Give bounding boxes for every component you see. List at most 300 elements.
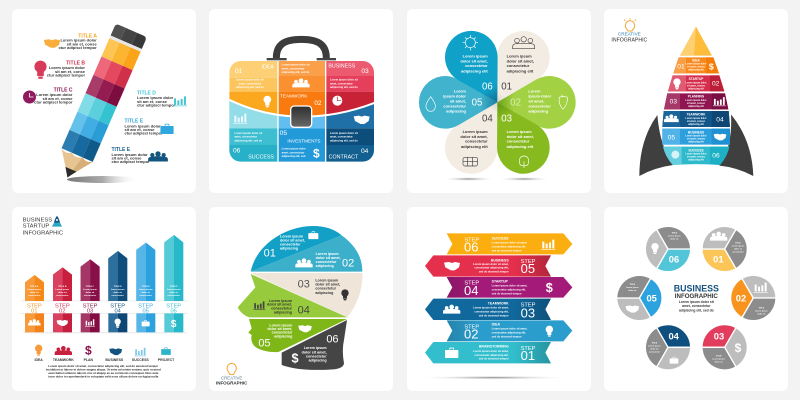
text block: title B: Lorem ipsum dolor bbox=[49, 65, 85, 70]
circle 06: TITLE bbox=[672, 232, 678, 234]
petal 02 bbox=[497, 76, 576, 129]
text block: title F bbox=[112, 147, 150, 164]
creative infographic logo: CREATIVE bbox=[221, 376, 242, 381]
text block: title E bbox=[124, 118, 163, 136]
row 03 planning: adipiscing elit bbox=[688, 105, 704, 108]
panel: flower infographic: 03 bbox=[501, 114, 512, 125]
arrow step 06: Lorem ipsum dolor sit amet, bbox=[492, 241, 527, 245]
row 06 success: sit amet, consec bbox=[687, 156, 706, 159]
panel: flower infographic: 04 bbox=[482, 114, 493, 125]
head segment 06 bbox=[282, 320, 347, 370]
text block: title C: sit am et, conse bbox=[42, 96, 73, 101]
circle 02: dolor sit bbox=[757, 312, 766, 315]
flower shadows bbox=[442, 177, 551, 181]
section 03 business: 03 bbox=[361, 68, 369, 75]
section 04 contract: CONTRACT bbox=[329, 155, 359, 161]
petal text and numbers: sit amet, bbox=[450, 98, 466, 103]
text block: title F: Lorem ipsum dolor bbox=[112, 152, 148, 157]
head numbers: 05 bbox=[258, 338, 271, 350]
circle 05: TITLE bbox=[630, 284, 636, 286]
text block: title D: ctur adipisci tempor bbox=[137, 102, 176, 108]
arrow step 03: STEP bbox=[521, 303, 536, 309]
arrow step 05: sed do eiusmod tempor bbox=[479, 270, 509, 274]
heading: INFOGRAPHIC bbox=[23, 230, 63, 236]
petal text and numbers: ipsum dolor bbox=[528, 93, 552, 98]
paragraph: exercitation ullamco laboris nisi ut aliquip ex ea commodo consequat. Duis aute bbox=[48, 371, 159, 375]
head icons bbox=[253, 231, 349, 366]
row 01 idea: Lorem ipsum dolor bbox=[685, 64, 707, 66]
creative infographic logo bbox=[216, 363, 248, 385]
bar step 06: $ bbox=[171, 319, 177, 330]
petal text and numbers: consectetur bbox=[507, 63, 530, 68]
paragraph: incididunt ut labore et dolore magna aliqua. Ut enim ad minim veniam, quis nostrud bbox=[46, 367, 161, 371]
bar step 01: STEP bbox=[27, 303, 42, 309]
legend icons bbox=[35, 343, 171, 357]
bar step 01: TITLE A bbox=[30, 285, 39, 288]
row 03 planning: 03 bbox=[670, 99, 677, 106]
circle 06: 06 bbox=[669, 255, 679, 265]
icon: strawberry outline bbox=[559, 95, 567, 109]
section 05 investments: 05 bbox=[280, 130, 287, 137]
section 05 investments: amet, consectetur bbox=[282, 150, 304, 154]
section 03 business: amet, consectetur bbox=[330, 81, 353, 85]
arrow step 05: STEP bbox=[521, 259, 536, 265]
arrow step 02: Lorem ipsum dolor sit amet, bbox=[492, 327, 527, 331]
row 02 startup: 02 bbox=[712, 81, 720, 88]
section 02 teamwork bbox=[280, 63, 322, 107]
circle 01: Lorem ipsum bbox=[732, 245, 744, 248]
circle 04: Lorem ipsum bbox=[648, 345, 661, 348]
arrow step 04: STEP bbox=[464, 280, 479, 286]
pencil bbox=[52, 24, 147, 184]
circle 04: 04 bbox=[668, 331, 680, 341]
section 05 investments: adipiscing elit, sed bbox=[282, 154, 306, 158]
head numbers: 03 bbox=[298, 279, 310, 291]
legend labels: BUSINESS bbox=[105, 358, 124, 362]
bar step 01: dolor sit bbox=[30, 291, 39, 294]
bar step 04: Lorem ipsum bbox=[111, 289, 125, 291]
row 04 teamwork: sit amet, consec bbox=[687, 120, 706, 123]
petal text and numbers: Lorem ipsum bbox=[463, 53, 488, 58]
row 03 planning bbox=[664, 93, 728, 109]
paragraph: irure dolor in reprehenderit in voluptate velit esse cillum dolore eu fugiat nulla bbox=[48, 374, 159, 378]
bar step 04 bbox=[108, 251, 127, 332]
text block: title E: ctur adipisci tempor bbox=[124, 130, 163, 136]
center heading: Lorem ipsum dolor sit bbox=[679, 300, 715, 304]
pencil shadow bbox=[67, 176, 139, 183]
circle 03 bbox=[694, 316, 756, 378]
arrow step 05: Lorem ipsum dolor sit amet, bbox=[473, 262, 509, 266]
circle 06: Lorem ipsum bbox=[668, 234, 681, 237]
head text blocks: adipiscing bbox=[274, 311, 292, 315]
icon: solar panel bbox=[463, 157, 478, 166]
arrow step 02: STEP bbox=[464, 324, 479, 330]
icon: briefcase bbox=[160, 124, 174, 134]
panel: head infographic bbox=[209, 207, 393, 391]
petal text and numbers: adipiscing elit bbox=[461, 144, 488, 149]
head text blocks: Lorem ipsum bbox=[280, 234, 304, 238]
bar step 01 bbox=[25, 275, 44, 332]
panel: flower infographic: 01 bbox=[501, 81, 512, 92]
row 01 idea: IDEA bbox=[692, 58, 700, 62]
head text blocks: adipiscing bbox=[315, 291, 333, 295]
section 06 success bbox=[233, 114, 274, 161]
arrow step 05: consectetur adipiscing elit, bbox=[474, 266, 509, 270]
head icons: $ bbox=[291, 352, 299, 366]
section 02 teamwork: 02 bbox=[314, 100, 322, 107]
head text blocks: dolor sit amet, bbox=[315, 283, 340, 287]
circle 03: $ bbox=[735, 341, 742, 355]
row 02 startup: Lorem ipsum dolor bbox=[685, 82, 707, 84]
circle 02 bbox=[731, 275, 776, 321]
legend labels: SUCCESS bbox=[132, 358, 149, 362]
bar step 06: consectetur bbox=[168, 294, 180, 297]
arrow step 01: consectetur adipiscing elit, bbox=[474, 353, 509, 357]
section 01 idea: IDEA bbox=[262, 65, 274, 71]
icon: handshake bbox=[44, 39, 60, 48]
petal 05 bbox=[419, 76, 497, 129]
rocket nose bbox=[680, 27, 712, 56]
petal text and numbers: Lorem ipsum bbox=[507, 53, 532, 58]
arrow step 03: Lorem ipsum dolor sit amet, bbox=[473, 305, 509, 309]
briefcase handle bbox=[267, 39, 336, 60]
bar step 01: 01 bbox=[31, 309, 37, 315]
bar step 05: dolor sit bbox=[141, 291, 150, 294]
row 06 success: SUCCESS bbox=[688, 148, 704, 152]
row 03 planning: sit amet, consec bbox=[687, 102, 706, 105]
section 01 idea: Lorem ipsum dolor sit bbox=[236, 78, 264, 82]
bar step 03: 03 bbox=[87, 309, 93, 315]
text block: title F: TITLE E bbox=[112, 147, 131, 153]
head text blocks: adipiscing bbox=[316, 264, 334, 268]
bar step 02 bbox=[53, 267, 72, 332]
arrow step 06: SUCCESS bbox=[492, 237, 509, 241]
bar step 02: TITLE B bbox=[58, 286, 67, 288]
row 05 business: Lorem ipsum dolor bbox=[685, 136, 707, 138]
petal text and numbers: Lorem ipsum bbox=[507, 129, 532, 134]
paragraph bbox=[46, 364, 161, 378]
section 03 business bbox=[328, 64, 369, 106]
section 04 contract: 04 bbox=[361, 148, 369, 155]
icon: pie chart bbox=[23, 90, 36, 104]
head segment 05 bbox=[248, 319, 347, 352]
petal text and numbers: dolor sit amet, bbox=[460, 134, 488, 139]
text block: title A: Lorem ipsum dolor bbox=[60, 38, 97, 42]
legend labels: TEAMWORK bbox=[53, 358, 74, 362]
section 01 idea: amet, consectetur bbox=[239, 81, 261, 85]
panel: rocket infographic bbox=[604, 9, 788, 193]
head text blocks: dolor sit amet, bbox=[267, 303, 292, 307]
petal text and numbers: adipiscing elit bbox=[507, 68, 534, 73]
section 04 contract: Lorem ipsum dolor sit bbox=[330, 131, 358, 135]
bar step 06: dolor sit bbox=[169, 291, 178, 294]
icon: people outline bbox=[513, 37, 535, 49]
head text blocks: adipiscing bbox=[280, 247, 298, 251]
bar step 04: consectetur bbox=[112, 294, 124, 297]
text block: title A: ctur adipisci tempor bbox=[58, 45, 97, 50]
circle 04: TITLE bbox=[652, 343, 658, 345]
bar step 06: 06 bbox=[171, 309, 177, 315]
row 01 idea: sit amet, consec bbox=[687, 66, 706, 69]
text block: title B: ctur adipisci tempor bbox=[47, 72, 85, 78]
head numbers: 01 bbox=[264, 247, 276, 259]
text block: title E: Lorem ipsum dolor bbox=[124, 124, 161, 128]
circle 06: dolor sit bbox=[670, 237, 679, 240]
arrow step 04: 04 bbox=[464, 283, 478, 298]
arrow step 01: STEP bbox=[521, 346, 536, 352]
petal text and numbers: consectetur bbox=[443, 103, 466, 108]
section 02 teamwork: adipiscing elit, sed do bbox=[282, 70, 310, 74]
head text blocks: dolor sit amet, bbox=[280, 239, 305, 243]
row 02 startup bbox=[668, 75, 724, 91]
petal text and numbers: Lorem bbox=[528, 88, 541, 93]
row 02 startup: adipiscing elit bbox=[688, 87, 704, 90]
petal text and numbers: adipiscing bbox=[446, 108, 467, 113]
arrow step 04: $ bbox=[546, 281, 553, 295]
row 05 business: adipiscing elit bbox=[688, 141, 704, 144]
arrow step 04: STARTUP bbox=[492, 279, 509, 283]
row 01 idea: $ bbox=[709, 61, 714, 71]
head text blocks: dolor sit amet, bbox=[302, 350, 327, 354]
head text blocks: Lorem ipsum bbox=[269, 323, 293, 327]
circle 04: consectetur bbox=[649, 351, 660, 354]
bar step 04: 04 bbox=[115, 309, 121, 315]
section 05 investments: Lorem ipsum dolor bbox=[282, 147, 306, 151]
paragraph: Lorem ipsum dolor sit amet, consectetur adipiscing elit, sed do eiusmod tempor bbox=[48, 364, 158, 368]
bar step 05: 05 bbox=[143, 309, 149, 315]
bar step 01: consectetur bbox=[28, 294, 41, 297]
row 01 idea: adipiscing elit bbox=[688, 69, 704, 72]
section 06 success: amet, consectetur bbox=[234, 135, 257, 139]
head text blocks: consectetur bbox=[315, 287, 337, 291]
text block: title A: sit am et, conse bbox=[67, 41, 97, 46]
petal text and numbers: consectetur bbox=[528, 103, 551, 108]
petal text and numbers: sit amet, bbox=[528, 98, 545, 103]
ground shadow bbox=[415, 376, 572, 380]
legend icons: $ bbox=[85, 343, 92, 357]
arrow step 01: Lorem ipsum dolor sit amet, bbox=[473, 349, 509, 353]
row 02 startup: STARTUP bbox=[689, 77, 703, 81]
section 04 contract bbox=[329, 116, 370, 161]
panel: flower infographic: 05 bbox=[472, 97, 482, 108]
arrow step 03: TEAMWORK bbox=[488, 301, 509, 305]
legend labels bbox=[35, 358, 175, 362]
legend labels: IDEA bbox=[35, 358, 43, 362]
head text blocks: adipiscing bbox=[309, 359, 327, 363]
bar step 02: consectetur bbox=[56, 294, 69, 297]
petal text and numbers: consectetur bbox=[465, 63, 488, 68]
bar step 03 bbox=[81, 259, 100, 332]
head text blocks: Lorem ipsum bbox=[316, 252, 339, 256]
head text blocks: Lorem ipsum bbox=[269, 299, 293, 303]
arrow step 02: IDEA bbox=[492, 323, 500, 327]
panel: flower infographic bbox=[407, 9, 591, 193]
icon: sun bbox=[463, 35, 478, 50]
creative infographic logo: CREATIVE bbox=[618, 32, 641, 37]
arrow step 05: BUSINESS bbox=[491, 258, 509, 262]
petal 04 bbox=[435, 89, 520, 183]
text block: title F: sit am et, conse bbox=[112, 156, 142, 160]
circle 04: dolor sit bbox=[650, 348, 659, 351]
section 02 teamwork: TEAMWORK bbox=[280, 94, 308, 99]
text block: title D bbox=[137, 90, 176, 108]
petal text and numbers: Lorem bbox=[454, 88, 466, 93]
briefcase clasp bbox=[291, 106, 312, 127]
head numbers: 06 bbox=[326, 334, 339, 346]
section 01 idea: 01 bbox=[235, 68, 243, 75]
circle 02: Lorem ipsum bbox=[755, 309, 768, 312]
creative infographic logo: INFOGRAPHIC bbox=[611, 38, 648, 44]
icon: bulb bbox=[34, 61, 47, 79]
arrow step 06 bbox=[447, 233, 572, 254]
section 06 success: adipiscing elit, sed do bbox=[234, 138, 262, 142]
row 02 startup: sit amet, consec bbox=[687, 84, 706, 87]
heading: BUSINESS bbox=[23, 217, 52, 223]
bar step 02: 02 bbox=[59, 309, 65, 315]
bar step 03: consectetur bbox=[84, 294, 96, 297]
circle 03: 03 bbox=[714, 331, 724, 341]
section 01 idea bbox=[235, 65, 274, 107]
petal text and numbers: ipsum dolor bbox=[443, 93, 466, 98]
bar step 05: Lorem ipsum bbox=[139, 289, 153, 291]
panel: flower infographic: 06 bbox=[482, 81, 493, 92]
arrow step 04: consectetur adipiscing elit, bbox=[492, 287, 526, 291]
creative infographic logo: INFOGRAPHIC bbox=[216, 380, 248, 385]
petal 01 bbox=[475, 21, 559, 115]
circle 01: consectetur bbox=[732, 251, 744, 254]
circle 04 bbox=[637, 316, 699, 378]
circle 01: 01 bbox=[713, 255, 724, 265]
head text blocks: consectetur bbox=[271, 307, 293, 311]
section 06 success: 06 bbox=[233, 148, 241, 155]
bar step 03: TITLE C bbox=[86, 286, 95, 288]
petal text and numbers: consectetur bbox=[465, 139, 488, 144]
rocket fins bbox=[639, 114, 753, 176]
section 01 idea: adipiscing elit, sed do bbox=[236, 85, 264, 89]
circle 03: Lorem ipsum bbox=[712, 357, 725, 360]
icon: tree bbox=[519, 156, 529, 168]
petal text and numbers: dolor sit amet, bbox=[507, 134, 534, 139]
text block: title D: sit am et, conse bbox=[137, 99, 168, 104]
arrow step 03: consectetur adipiscing elit, bbox=[474, 309, 509, 313]
text block: title F: ctur adipisci tempor bbox=[112, 159, 150, 164]
petal 06 bbox=[435, 21, 520, 115]
arrow step 02: 02 bbox=[464, 327, 478, 342]
petal text and numbers: adipiscing elit bbox=[461, 68, 488, 73]
section 03 business: Lorem ipsum dolor sit bbox=[330, 78, 358, 82]
row 06 success bbox=[663, 147, 729, 165]
circle 01 bbox=[694, 218, 756, 280]
bar step 03: STEP bbox=[83, 303, 98, 309]
petal text and numbers: consectetur bbox=[507, 139, 530, 144]
head numbers bbox=[258, 247, 354, 350]
section 05 investments: $ bbox=[313, 147, 320, 161]
panel: pencil infographic bbox=[12, 9, 196, 193]
text block: title B bbox=[47, 60, 86, 78]
text block: title A: TITLE A bbox=[78, 34, 97, 40]
row 04 teamwork: Lorem ipsum dolor bbox=[685, 118, 707, 120]
row 01 idea: 01 bbox=[677, 63, 685, 70]
circle 03: TITLE bbox=[716, 355, 722, 357]
center heading: adipiscing elit, sed do bbox=[679, 308, 714, 312]
row 06 success: 06 bbox=[712, 152, 720, 159]
head numbers: 04 bbox=[298, 305, 310, 317]
row 06 success: adipiscing elit bbox=[688, 159, 704, 162]
petal text and numbers: dolor sit amet, bbox=[507, 58, 534, 63]
arrow step 03: 03 bbox=[521, 305, 535, 320]
icon: water drop bbox=[426, 97, 435, 111]
circle 01: dolor sit bbox=[734, 248, 742, 251]
icon: rocket bbox=[52, 216, 62, 227]
petal text and numbers: dolor sit amet, bbox=[460, 58, 488, 63]
head segment 02 bbox=[251, 235, 362, 272]
circle 06 bbox=[637, 218, 699, 280]
center heading: INFOGRAPHIC bbox=[675, 293, 718, 300]
center heading: amet, consectetur bbox=[682, 304, 711, 308]
head text blocks bbox=[267, 234, 341, 363]
bar step 06 bbox=[164, 235, 183, 332]
icon: people bbox=[148, 151, 168, 162]
arrow step 04: Lorem ipsum dolor sit amet, bbox=[492, 283, 527, 287]
arrow step 02: consectetur adipiscing elit, bbox=[492, 331, 526, 335]
section 05 investments bbox=[280, 130, 320, 161]
circle 05: dolor sit bbox=[628, 289, 637, 292]
head text blocks: consectetur bbox=[306, 354, 327, 358]
bar step 03: Lorem ipsum bbox=[83, 289, 97, 291]
section 04 contract: adipiscing elit, sed do bbox=[330, 138, 358, 142]
row 04 teamwork: TEAMWORK bbox=[687, 113, 706, 117]
row 03 planning: PLANNING bbox=[688, 95, 705, 99]
section 02 teamwork: Lorem ipsum dolor sit bbox=[282, 63, 310, 67]
head text blocks: Lorem ipsum bbox=[304, 346, 327, 350]
bar step 05: consectetur bbox=[140, 294, 152, 297]
head text blocks: dolor sit amet, bbox=[267, 327, 292, 331]
creative infographic logo bbox=[611, 18, 648, 44]
arrow step 01: BRAINSTORMING bbox=[479, 344, 509, 348]
head text blocks: adipiscing bbox=[274, 335, 292, 339]
bar step 04: dolor sit bbox=[113, 291, 122, 294]
section 06 success: Lorem ipsum dolor sit bbox=[234, 131, 262, 135]
bar step 05 bbox=[136, 243, 155, 332]
text block: title D: Lorem ipsum dolor bbox=[137, 95, 174, 100]
bar step 06: STEP bbox=[166, 303, 181, 309]
row 04 teamwork bbox=[662, 111, 730, 127]
text block: title D: TITLE D bbox=[137, 90, 156, 96]
section 02 teamwork: amet, consectetur bbox=[282, 66, 304, 70]
bar step 02: Lorem ipsum bbox=[56, 289, 69, 291]
text block: title C: ctur adipisci tempor bbox=[34, 100, 73, 104]
row 04 teamwork: adipiscing elit bbox=[688, 123, 704, 126]
arrow step 05 bbox=[425, 255, 551, 277]
arrow step 06: consectetur adipiscing elit, bbox=[492, 245, 526, 249]
panel: business startup bars bbox=[12, 207, 196, 391]
text block: title C: Lorem ipsum dolor bbox=[36, 92, 73, 97]
panel: briefcase infographic bbox=[209, 9, 393, 193]
center heading bbox=[674, 284, 719, 312]
petal text and numbers: Lorem ipsum bbox=[463, 129, 488, 134]
legend labels: PLAN bbox=[84, 358, 94, 362]
bar step 04: TITLE D bbox=[114, 286, 122, 288]
petal text and numbers bbox=[443, 53, 552, 149]
arrow step 03: sed do eiusmod tempor bbox=[479, 314, 509, 318]
head text blocks: dolor sit amet, bbox=[316, 256, 341, 260]
circle 02: TITLE bbox=[759, 307, 765, 309]
head text blocks: consectetur bbox=[316, 260, 337, 264]
center heading: BUSINESS bbox=[674, 284, 719, 294]
petal 03 bbox=[475, 89, 559, 183]
heading: STARTUP bbox=[23, 223, 49, 229]
arrow step 06: sed do eiusmod tempor bbox=[492, 249, 522, 253]
